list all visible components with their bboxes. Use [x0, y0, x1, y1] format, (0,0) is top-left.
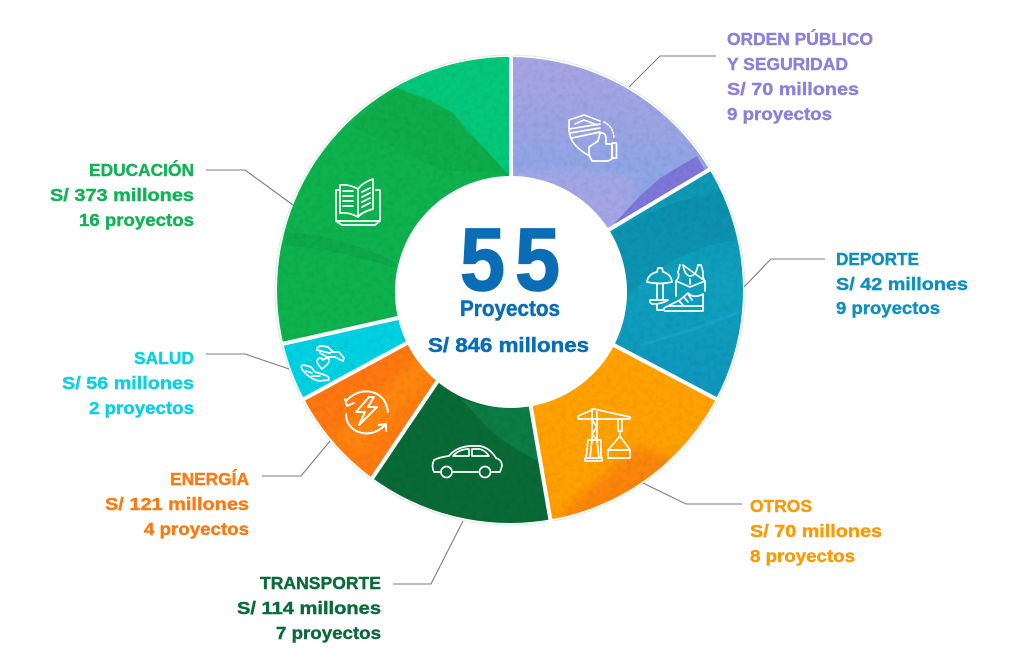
label: otros: [750, 496, 882, 566]
icon: hands and heart: [301, 346, 344, 381]
label: salud: [62, 348, 194, 418]
label: transporte: TRANSPORTE: [260, 573, 381, 593]
donut chart: [274, 54, 746, 526]
segment: orden público y seguridad: [513, 57, 708, 228]
label: energía: [105, 468, 249, 539]
label: salud: SALUD: [134, 348, 194, 368]
label: educación: EDUCACIÓN: [89, 159, 194, 180]
label: deporte: [836, 249, 968, 318]
center total: 5: [460, 209, 505, 309]
leader: orden público: [629, 56, 716, 87]
icon: construction crane: [578, 409, 630, 461]
segment: otros: [532, 346, 715, 519]
label: educación: 16 proyectos: [79, 210, 194, 230]
label: transporte: S/ 114 millones: [237, 598, 381, 618]
leader: educación: [206, 170, 293, 205]
label: orden público y seguridad: 9 proyectos: [727, 104, 832, 124]
label: otros: 8 proyectos: [750, 546, 855, 566]
center total: [428, 209, 589, 357]
label: educación: [50, 159, 194, 230]
leader: salud: [206, 354, 289, 369]
segment: educación: [277, 57, 509, 342]
leader: deporte: [744, 259, 825, 287]
label: salud: 2 proyectos: [89, 398, 194, 418]
label: energía: ENERGÍA: [170, 468, 249, 489]
icon: sports gear: [647, 265, 705, 311]
segment: deporte: [610, 171, 743, 398]
icon: book: [336, 179, 380, 225]
label: otros: S/ 70 millones: [750, 521, 882, 541]
icon: energy: [345, 391, 388, 433]
leader: energía: [262, 441, 330, 476]
label: orden público y seguridad: Y SEGURIDAD: [727, 54, 848, 74]
label: energía: 4 proyectos: [144, 519, 249, 539]
label: otros: OTROS: [750, 496, 812, 516]
center total: Proyectos: [460, 296, 560, 321]
label: salud: S/ 56 millones: [62, 373, 194, 393]
label: deporte: S/ 42 millones: [836, 274, 968, 294]
segment: energía: [305, 342, 436, 477]
label: deporte: DEPORTE: [836, 249, 919, 269]
center total: S/ 846 millones: [428, 335, 589, 357]
leader: otros: [643, 483, 742, 504]
center total: 5: [515, 209, 560, 309]
segment: transporte: [374, 382, 548, 523]
label: orden público y seguridad: S/ 70 millones: [727, 79, 859, 99]
icon: car: [432, 446, 502, 478]
label: transporte: [237, 573, 381, 643]
leader: transporte: [393, 521, 463, 584]
label: energía: S/ 121 millones: [105, 494, 249, 514]
segment: salud: [284, 318, 406, 398]
label: transporte: 7 proyectos: [276, 623, 381, 643]
label: deporte: 9 proyectos: [836, 298, 940, 318]
label: orden público y seguridad: [727, 28, 873, 124]
icon: shield and thumbs up: [569, 115, 616, 161]
label: orden público y seguridad: ORDEN PÚBLICO: [727, 28, 873, 49]
label: educación: S/ 373 millones: [50, 185, 194, 205]
